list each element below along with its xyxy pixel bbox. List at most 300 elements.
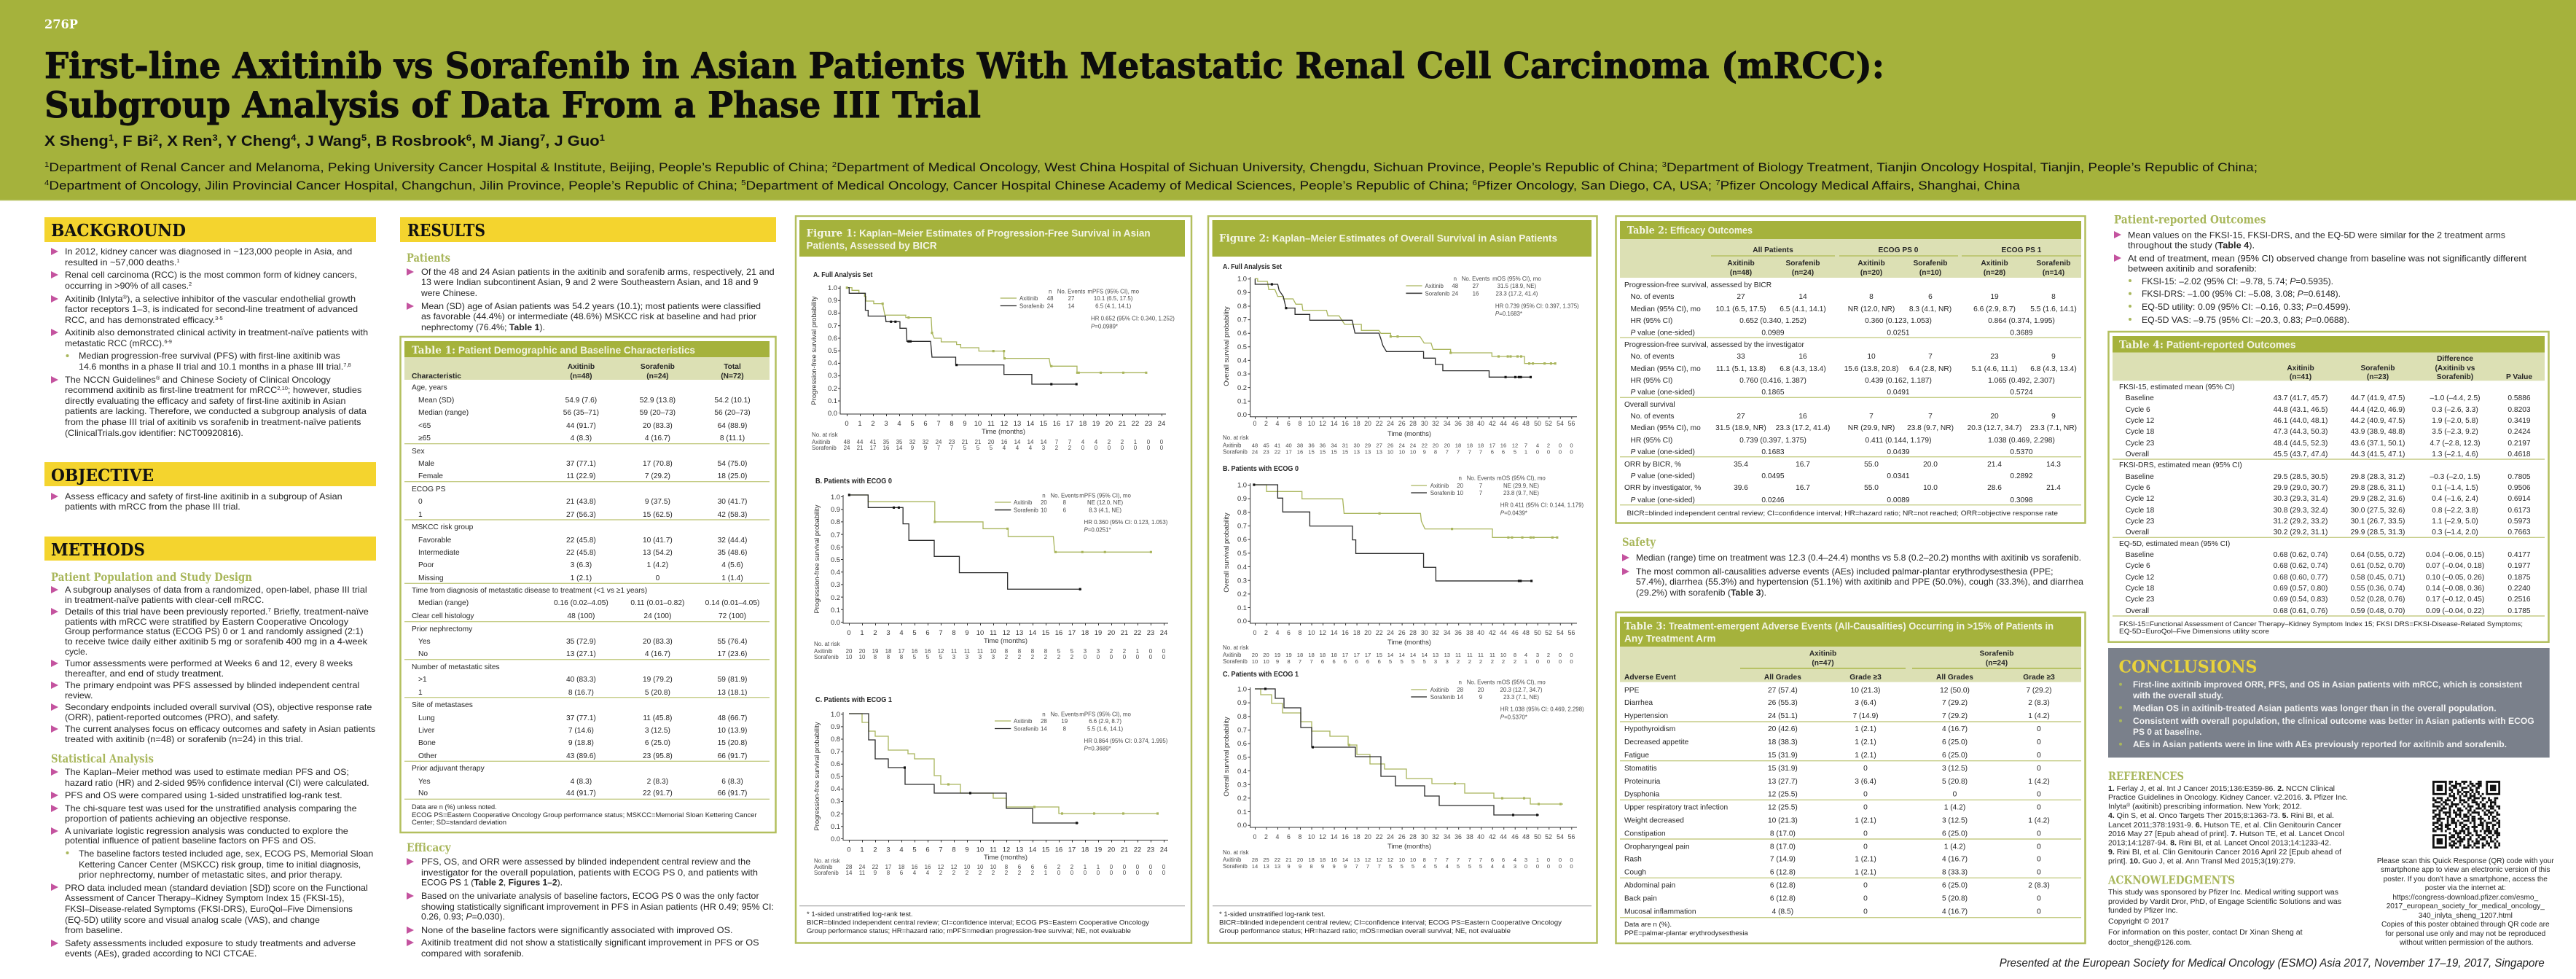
- chart 2B: ECOG 0 OS: Sorafenib: [1430, 490, 1455, 496]
- chart 2A: full analysis set OS: 0.1: [1237, 397, 1247, 405]
- conclusions bullets: with the overall study.: [2132, 690, 2223, 701]
- chart 1C: ECOG 1 PFS: 0: [1136, 864, 1140, 870]
- table 3 rows: 0: [1863, 765, 1868, 773]
- chart 2C: ECOG 1 OS: 25: [1263, 857, 1269, 863]
- chart 2A: full analysis set OS: 18: [1467, 442, 1473, 449]
- table 2 rows: 23.8 (9.7, NR): [1907, 424, 1954, 432]
- chart 2C: ECOG 1 OS: 9: [1321, 863, 1324, 870]
- chart 1C: ECOG 1 PFS: P=0.3689*: [1084, 746, 1111, 752]
- chart 2C: ECOG 1 OS: 7: [1457, 857, 1460, 863]
- statistical analysis bullets: A univariate logistic regression analysis was conducted to explore the: [65, 826, 348, 836]
- table 1 rows: 1: [418, 689, 423, 697]
- table 4 rows: 44.7 (41.9, 47.5): [2351, 394, 2405, 402]
- chart 1A: full analysis set PFS: 0: [1160, 445, 1164, 451]
- chart 2C: ECOG 1 OS: 0.9: [1237, 698, 1247, 706]
- chart 1B: ECOG 0 PFS: 5: [1057, 648, 1061, 655]
- chart 2C: ECOG 1 OS: Axitinib: [1223, 857, 1242, 863]
- chart 1B: ECOG 0 PFS: 0.2: [831, 593, 840, 601]
- chart 2A: full analysis set OS: 28: [1409, 420, 1417, 427]
- table 1 rows: 20 (83.3): [643, 422, 673, 430]
- table 1 rows: Prior adjuvant therapy: [412, 765, 485, 773]
- chart 1C: ECOG 1 PFS: 0: [847, 846, 851, 853]
- chart 1A: full analysis set PFS: 6.5 (4.1, 14.1): [1095, 303, 1132, 309]
- chart 2C: ECOG 1 OS: 36: [1455, 833, 1462, 840]
- chart 2B: ECOG 0 OS: 8: [1287, 658, 1291, 665]
- affiliations: [44, 161, 2258, 192]
- table 2 column headers: (n=14): [2043, 269, 2064, 277]
- chart 2B: ECOG 0 OS: 10: [1263, 658, 1269, 665]
- chart 1A: full analysis set PFS: 16: [1053, 419, 1060, 427]
- affiliations: 4: [44, 179, 50, 187]
- table 3 rows: Oropharyngeal pain: [1624, 843, 1689, 851]
- table 3 rows: 13 (27.7): [1768, 778, 1798, 786]
- chart 1C: ECOG 1 PFS: 22: [1134, 846, 1141, 853]
- table 4 rows: 1.1 (–2.9, 5.0): [2432, 518, 2478, 526]
- efficacy bullets: ECOG PS 1 (Table 2, Figures 1–2).: [421, 878, 563, 888]
- figure 2 footnote: BICR=blinded independent central review; CI=confidence interval; ECOG PS=Eastern Cooperative Oncology: [1219, 918, 1562, 927]
- chart 2B: ECOG 0 OS: 4: [1524, 652, 1527, 658]
- chart 2A: full analysis set OS: P=0.1683*: [1495, 311, 1522, 317]
- chart 1A: full analysis set PFS: n: [1049, 288, 1052, 295]
- QR instructions text: smartphone app to view an electronic version of this: [2381, 866, 2550, 874]
- chart 1C: ECOG 1 PFS: 0.2: [831, 810, 840, 818]
- table 3 rows: 7 (29.2): [2026, 687, 2052, 695]
- table 2: efficacy outcomes: [1616, 216, 2086, 523]
- patient population bullets: Details of this trial have been previously reported.: [65, 606, 253, 617]
- chart 2B: ECOG 0 OS: 3: [1446, 658, 1449, 665]
- chart 1B: ECOG 0 PFS: 10: [976, 628, 984, 636]
- statistical analysis bullets: from baseline.: [65, 925, 122, 935]
- chart 1C: ECOG 1 PFS: 2: [1018, 870, 1021, 876]
- background bullets: 2: [189, 282, 192, 287]
- chart 2C: ECOG 1 OS: 52: [1545, 833, 1552, 840]
- chart 2A: full analysis set OS: 10: [1387, 448, 1393, 455]
- heading: background: BACKGROUND: [51, 221, 186, 241]
- subheading: patient-reported outcomes: Patient-reported Outcomes: [2114, 213, 2266, 227]
- table 1 rows: 10 (13.9): [718, 727, 747, 735]
- chart 1B: ECOG 0 PFS: 0.3: [831, 580, 840, 588]
- chart 1A: full analysis set PFS: 3: [884, 419, 888, 427]
- table 3 rows: 1 (4.2): [2028, 778, 2050, 786]
- table 1 rows: 54 (75.0): [718, 460, 747, 468]
- table 2 rows: 0.1683: [1761, 448, 1785, 456]
- chart 1A: full analysis set PFS: 11: [987, 419, 995, 427]
- chart 1C: ECOG 1 PFS: 3: [886, 846, 890, 853]
- chart 2C: ECOG 1 OS: 14: [1457, 694, 1464, 701]
- table 3 rows: 12 (50.0): [1940, 687, 1970, 695]
- table 2 rows: 0.0246: [1761, 496, 1785, 504]
- chart 1C: ECOG 1 PFS: 10: [977, 864, 984, 870]
- table 4 rows: 0.7805: [2508, 473, 2531, 481]
- table 3 column headers: Grade ≥3: [2023, 674, 2055, 682]
- background bullets: patients are lacking. Therefore, we conducted a subgroup analysis of data: [65, 406, 367, 416]
- chart 1C: ECOG 1 PFS: 0.0: [831, 835, 840, 843]
- table 2 rows: 0.0495: [1761, 472, 1785, 480]
- chart 2B: ECOG 0 OS: 54: [1557, 629, 1564, 636]
- chart 2B: ECOG 0 OS: 3: [1434, 658, 1437, 665]
- panel: methods: [44, 537, 376, 959]
- chart 2B: ECOG 0 OS: 14: [1387, 652, 1393, 658]
- chart 1C: ECOG 1 PFS: 4: [899, 846, 904, 853]
- chart 2C: ECOG 1 OS: P=0.5370*: [1500, 714, 1527, 720]
- table 2 column headers: Sorafenib: [1914, 260, 1947, 268]
- chart 1B: ECOG 0 PFS: 3: [1084, 648, 1087, 655]
- chart 2A: full analysis set OS: 44: [1500, 420, 1507, 427]
- affiliations: 2: [832, 161, 837, 169]
- chart 2C: ECOG 1 OS: No. at risk: [1223, 849, 1249, 856]
- table 3 rows: 0: [1863, 895, 1868, 902]
- table 4 rows: 0.3419: [2508, 417, 2531, 425]
- chart 1B: ECOG 0 PFS: 3: [979, 654, 982, 660]
- chart 1C: ECOG 1 PFS: 5: [912, 846, 917, 853]
- table 4 rows: 31.2 (29.2, 33.2): [2274, 518, 2328, 526]
- reference list: 9. Rini BI, et al. Clin Genitourin Cancer 2016 April 22 [Epub ahead of: [2108, 849, 2341, 857]
- chart 1B: ECOG 0 PFS: Time (months): [984, 636, 1027, 644]
- objective bullet: patients with mRCC from the phase III trial.: [65, 502, 240, 512]
- chart 2A: full analysis set OS: Axitinib: [1425, 283, 1444, 289]
- safety bullets: [1622, 553, 2083, 598]
- chart 2C: ECOG 1 OS: 22: [1275, 857, 1280, 863]
- table 2 rows: 8: [2051, 293, 2056, 301]
- chart 1C: ECOG 1 PFS: 23: [1147, 846, 1154, 853]
- chart 1C: ECOG 1 PFS: 2: [992, 870, 995, 876]
- figure 1 footnote: Group performance status; HR=hazard ratio; mPFS=median progression-free survival; NE, not evaluable: [807, 927, 1131, 935]
- table 2 rows: 0.0491: [1887, 389, 1910, 397]
- chart 2C: ECOG 1 OS: 0: [1559, 857, 1562, 863]
- panel: references: [2107, 769, 2348, 947]
- chart 2C: ECOG 1 OS: 20.3 (12.7, 34.7): [1500, 687, 1543, 693]
- chart 1C: ECOG 1 PFS: 0: [1136, 870, 1140, 876]
- chart 2B: ECOG 0 OS: 0.4: [1237, 563, 1247, 571]
- chart 2C: ECOG 1 OS: 1: [1536, 857, 1539, 863]
- table 3 column headers: Grade ≥3: [1849, 674, 1882, 682]
- conclusions bullets: Consistent with overall population, the clinical outcome was better in Asian patients with ECOG: [2133, 716, 2534, 726]
- chart 1C: ECOG 1 PFS: 2: [1070, 864, 1073, 870]
- chart 2B: ECOG 0 OS: 28: [1409, 629, 1417, 636]
- table 2 rows: 11.1 (5.1, 13.8): [1716, 365, 1766, 373]
- table 2 rows: 21.4: [2046, 484, 2061, 492]
- chart 2B: ECOG 0 OS: 24: [1387, 629, 1394, 636]
- table 4 rows: 29.9 (29.0, 30.7): [2274, 484, 2328, 492]
- chart 2B: ECOG 0 OS: 14: [1422, 652, 1428, 658]
- chart 1C: ECOG 1 PFS: 0.3: [831, 797, 840, 805]
- chart 1C: ECOG 1 PFS: 0.7: [831, 747, 840, 755]
- table 1 rows: 4 (16.7): [645, 650, 670, 658]
- chart 2C: ECOG 1 OS: 38: [1466, 833, 1473, 840]
- table 2 column headers: ECOG PS 0: [1879, 246, 1919, 254]
- table 1 rows: 37 (77.1): [566, 460, 596, 468]
- chart 1B: ECOG 0 PFS: 13: [1016, 628, 1023, 636]
- chart 1B: ECOG 0 PFS: 11: [964, 648, 970, 655]
- table 4 rows: –1.0 (–4.4, 2.5): [2430, 394, 2481, 402]
- chart 2C: ECOG 1 OS: 34: [1444, 833, 1451, 840]
- table 2 rows: 20.0: [1923, 461, 1938, 469]
- chart 1C: ECOG 1 PFS: 8: [952, 846, 956, 853]
- chart 1B: ECOG 0 PFS: 6: [1063, 507, 1067, 513]
- chart 1B: ECOG 0 PFS: P=0.0251*: [1084, 527, 1111, 534]
- table 3 rows: Cough: [1624, 869, 1646, 876]
- safety bullets: Median (range) time on treatment was 12.3 (0.4–24.4) months vs 5.8 (0.2–20.2) months with axitinib vs sorafenib.: [1636, 553, 2081, 563]
- background bullets: Median progression-free survival (PFS) with first-line axitinib was: [79, 351, 340, 361]
- table 1: demographics: [401, 337, 775, 832]
- chart 2C: ECOG 1 OS: 46: [1511, 833, 1519, 840]
- chart 1A: full analysis set PFS: No. at risk: [812, 432, 838, 438]
- chart 1C: ECOG 1 PFS: 2: [1031, 870, 1034, 876]
- chart 1B: ECOG 0 PFS: 8: [900, 654, 904, 660]
- chart 1B: ECOG 0 PFS: 0: [1149, 654, 1153, 660]
- table 4 rows: [2113, 383, 2545, 616]
- figure 1 title: Figure 1: Kaplan–Meier Estimates of Progression-Free Survival in Asian: [807, 227, 1151, 239]
- chart 1A: full analysis set PFS: 0.2: [828, 384, 837, 392]
- table 3 rows: 0: [1863, 803, 1868, 812]
- table 2 rows: Median (95% CI), mo: [1631, 365, 1701, 373]
- chart 2C: ECOG 1 OS: 28: [1252, 857, 1258, 863]
- table 4 rows: 0.3 (–2.6, 3.3): [2432, 406, 2478, 414]
- chart 2A: full analysis set OS: 1.0: [1237, 274, 1247, 283]
- table 1 rows: Median (range): [418, 599, 469, 607]
- chart 2B: ECOG 0 OS: 20: [1252, 652, 1258, 658]
- chart 2C: ECOG 1 OS: 0: [1253, 833, 1257, 840]
- safety bullets: (29.2%) with sorafenib ( Table 3).: [1636, 588, 1766, 598]
- table 4 rows: 43.9 (38.9, 48.8): [2351, 428, 2405, 436]
- statistical analysis bullets: FKSI–Disease-related Symptoms (FKSI-DRS), EuroQol–Five Dimensions: [65, 904, 353, 914]
- table 3 rows: 6 (25.0): [1942, 752, 1968, 760]
- table 1 rows: 7 (14.6): [568, 727, 594, 735]
- table 1 rows: 22 (45.8): [566, 549, 596, 557]
- chart 2A: full analysis set OS: Time (months): [1387, 429, 1431, 437]
- table 1 rows: 66 (91.7): [718, 752, 747, 760]
- chart 1C: ECOG 1 PFS: No. Events: [1050, 711, 1078, 717]
- chart 2B: ECOG 0 OS: 2: [1457, 658, 1460, 665]
- table 2 rows: 27: [1737, 413, 1745, 421]
- authors: , F Bi: [114, 133, 153, 149]
- heading: objective: OBJECTIVE: [51, 466, 154, 485]
- table 3 rows: 5 (20.8): [1942, 895, 1968, 902]
- chart 1B: ECOG 0 PFS: 2: [1031, 654, 1034, 660]
- chart 1C: ECOG 1 PFS: 18: [1081, 846, 1089, 853]
- table 3 rows: Dysphonia: [1624, 790, 1659, 799]
- chart 2B: ECOG 0 OS: 2: [1514, 658, 1516, 665]
- chart 2C: ECOG 1 OS: 4: [1276, 833, 1280, 840]
- chart 1B: ECOG 0 PFS: 11: [990, 628, 997, 636]
- chart 2C: ECOG 1 OS: 0: [1570, 863, 1573, 870]
- PRO bullets: [2114, 230, 2527, 325]
- PRO bullets: EQ-5D VAS: –9.75 (95% CI: –20.3, 0.83; P=0.0688).: [2142, 315, 2349, 325]
- chart 1C: ECOG 1 PFS: 0: [1070, 870, 1074, 876]
- authors: 3: [212, 133, 218, 143]
- chart 2B: ECOG 0 OS: 23.8 (9.7, NE): [1503, 490, 1539, 496]
- table 3 rows: Back pain: [1624, 895, 1657, 902]
- table 2 column headers: ECOG PS 1: [2002, 246, 2042, 254]
- chart 1C: ECOG 1 PFS: 0.9: [831, 722, 840, 730]
- chart 2C: ECOG 1 OS: 16: [1342, 833, 1349, 840]
- heading: acknowledgments: ACKNOWLEDGMENTS: [2107, 873, 2235, 887]
- patient population bullets: Tumor assessments were performed at Weeks 6 and 12, every 8 weeks: [65, 658, 353, 668]
- chart 2A: full analysis set OS: 30: [1421, 420, 1428, 427]
- table 2 rows: 21.4: [1987, 461, 2002, 469]
- chart 2C: ECOG 1 OS: 5: [1468, 863, 1471, 870]
- chart 1A: full analysis set PFS: 20: [988, 439, 995, 445]
- table 1 rows: 13 (54.2): [643, 549, 673, 557]
- table 4 footnote: [2119, 620, 2523, 636]
- table 3 rows: PPE: [1624, 687, 1640, 695]
- chart 2C: ECOG 1 OS: 14: [1331, 833, 1338, 840]
- table 3 column headers: All Grades: [1764, 674, 1801, 682]
- chart 2A: full analysis set OS: 4: [1536, 442, 1539, 449]
- chart 2A: full analysis set OS: 10: [1410, 448, 1416, 455]
- chart 1A: full analysis set PFS: 14: [896, 445, 903, 451]
- chart 1A: full analysis set PFS: [810, 271, 1175, 451]
- background bullets: occurring in >90% of all cases.: [65, 281, 181, 291]
- chart 2A: full analysis set OS: 15: [1342, 448, 1348, 455]
- chart 2B: ECOG 0 OS: mOS (95% CI), mo: [1497, 475, 1546, 481]
- table 4 column headers: (n=23): [2367, 373, 2389, 381]
- chart 2A: full analysis set OS: 26: [1398, 420, 1406, 427]
- statistical analysis bullets: The baseline factors tested included age, sex, ECOG PS, Memorial Sloan: [79, 849, 373, 859]
- chart 2A: full analysis set OS: 48: [1452, 283, 1459, 289]
- chart 2C: ECOG 1 OS: 10: [1410, 857, 1416, 863]
- chart 2C: ECOG 1 OS: 0: [1536, 863, 1539, 870]
- chart 2C: ECOG 1 OS: 24: [1387, 833, 1394, 840]
- table 2 column headers: Axitinib: [1981, 260, 2008, 268]
- chart 1B: ECOG 0 PFS: 1: [860, 628, 864, 636]
- chart 2C: ECOG 1 OS: 7: [1378, 863, 1381, 870]
- chart 1B: ECOG 0 PFS: 11: [951, 648, 957, 655]
- chart 2C: ECOG 1 OS: 26: [1398, 833, 1406, 840]
- background bullets: recommend axitinib as first-line treatment for mRCC: [65, 385, 262, 395]
- table 4 rows: 0.17 (–0.12, 0.45): [2426, 596, 2484, 604]
- table 2 rows: 0.0439: [1887, 448, 1910, 456]
- chart 2C: ECOG 1 OS: 5: [1412, 863, 1414, 870]
- chart 2C: ECOG 1 OS: 5: [1457, 863, 1460, 870]
- chart 2B: ECOG 0 OS: 20: [1457, 483, 1464, 489]
- chart 1C: ECOG 1 PFS: 0: [1123, 864, 1127, 870]
- table 2 rows: 9: [2051, 413, 2056, 421]
- table 1 rows: 23 (95.8): [643, 752, 673, 760]
- chart 2B: ECOG 0 OS: 32: [1432, 629, 1439, 636]
- safety bullets: The most common all-causalities adverse events (AEs) included palmar-plantar erythrodysesthesia (PPE;: [1636, 566, 2054, 577]
- chart 2C: ECOG 1 OS: 18: [1308, 857, 1315, 863]
- chart 2C: ECOG 1 OS: 0.8: [1237, 712, 1247, 720]
- table 1 rows: 52.9 (13.8): [640, 397, 676, 405]
- table 3 rows: 4 (16.7): [1942, 908, 1968, 916]
- PRO bullets: Mean values on the FKSI-15, FKSI-DRS, and the EQ-5D were similar for the 2 treatment arms: [2128, 230, 2505, 240]
- chart 2B: ECOG 0 OS: 18: [1308, 652, 1315, 658]
- table 2 rows: 23.3 (17.2, 41.4): [1776, 424, 1830, 432]
- chart 1A: full analysis set PFS: 0: [1147, 439, 1151, 445]
- chart 2B: ECOG 0 OS: 2: [1479, 658, 1482, 665]
- chart 2B: ECOG 0 OS: 13: [1433, 652, 1438, 658]
- table 1 rows: ≥65: [418, 434, 431, 442]
- table 2 rows: 6: [1928, 293, 1933, 301]
- chart 2B: ECOG 0 OS: 13: [1444, 652, 1450, 658]
- chart 1A: full analysis set PFS: 6: [923, 419, 928, 427]
- chart 2A: full analysis set OS: 17: [1489, 442, 1495, 449]
- chart 1B: ECOG 0 PFS: 0.4: [831, 568, 840, 576]
- chart 2A: full analysis set OS: 24: [1452, 290, 1459, 297]
- table 1 rows: 43 (89.6): [566, 752, 596, 760]
- chart 1C: ECOG 1 PFS: 0.8: [831, 735, 840, 743]
- chart 1C: ECOG 1 PFS: 10: [976, 846, 984, 853]
- chart 2C: ECOG 1 OS: 7: [1355, 863, 1358, 870]
- chart 2B: ECOG 0 OS: P=0.0439*: [1500, 510, 1527, 516]
- table 3 rows: Mucosal inflammation: [1624, 908, 1696, 916]
- chart 2A: full analysis set OS: 0: [1559, 448, 1562, 455]
- chart 2A: full analysis set OS: 0: [1253, 420, 1257, 427]
- patient population bullets: cycle.: [65, 647, 87, 657]
- table 1 rows: 3 (12.5): [645, 727, 670, 735]
- chart 1C: ECOG 1 PFS: 0: [1149, 870, 1153, 876]
- chart 2A: full analysis set OS: 18: [1478, 442, 1484, 449]
- chart 2A: full analysis set OS: 4: [1276, 420, 1280, 427]
- chart 1A: full analysis set PFS: 0: [1095, 445, 1098, 451]
- chart 1B: ECOG 0 PFS: 2: [1123, 648, 1126, 655]
- chart 2A: full analysis set OS: Overall survival probability: [1222, 306, 1230, 386]
- table 2 title: Table 2: Efficacy Outcomes: [1627, 225, 1753, 236]
- table 3 rows: 0: [2037, 765, 2041, 773]
- background bullets: 3-5: [215, 316, 223, 321]
- table 1 rows: Male: [418, 460, 434, 468]
- table 2 column headers: Sorafenib: [1786, 260, 1820, 268]
- chart 1B: ECOG 0 PFS: 8: [952, 628, 956, 636]
- chart 2A: full analysis set OS: 50: [1534, 420, 1541, 427]
- chart 2C: ECOG 1 OS: 40: [1477, 833, 1484, 840]
- chart 2A: full analysis set OS: 23: [1263, 448, 1269, 455]
- chart 1B: ECOG 0 PFS: 2: [1070, 654, 1073, 660]
- chart 1A: full analysis set PFS: HR 0.652 (95% CI: 0.340, 1.252): [1091, 316, 1175, 322]
- patients bullets: nephrectomy (76.4%; Table 1).: [421, 322, 545, 332]
- table 4 rows: 29.9 (28.5, 31.3): [2351, 528, 2405, 537]
- table 1 title: Table 1: Patient Demographic and Baseline Characteristics: [412, 344, 695, 356]
- table 4 rows: Cycle 6: [2126, 562, 2150, 570]
- chart 2A: full analysis set OS: 54: [1557, 420, 1564, 427]
- chart 2A: full analysis set OS: 20: [1433, 442, 1438, 449]
- patient population bullets: Group performance status (ECOG PS) 0 or 1 and randomly assigned (2:1): [65, 626, 364, 636]
- table 4 rows: Baseline: [2126, 551, 2154, 559]
- chart 2C: ECOG 1 OS: 0: [1524, 863, 1527, 870]
- chart 2B: ECOG 0 OS: 1.0: [1237, 481, 1247, 488]
- chart 2A: full analysis set OS: 6: [1502, 448, 1505, 455]
- heading: references: REFERENCES: [2108, 769, 2184, 783]
- table 3 rows: 0: [2037, 856, 2041, 863]
- figure 1 title: Patients, Assessed by BICR: [807, 239, 937, 251]
- reference list: 2016 May 27 [Epub ahead of print]. 7. Hutson TE, et al. Lancet Oncol: [2108, 830, 2344, 838]
- figure 1 footnote: [799, 906, 1185, 935]
- table 1 rows: 30 (41.7): [718, 498, 747, 506]
- table 1 rows: Missing: [418, 574, 444, 582]
- panel: safety text: [1622, 535, 2083, 598]
- chart 1A: full analysis set PFS: 0.0: [828, 409, 837, 417]
- chart 1C: ECOG 1 PFS: mPFS (95% CI), mo: [1079, 711, 1132, 717]
- table 1 column headers: Characteristic: [412, 373, 461, 381]
- chart 1C: ECOG 1 PFS: 0: [1057, 870, 1061, 876]
- table 3 rows: 0: [2037, 908, 2041, 916]
- table 2 rows: 0.760 (0.416, 1.387): [1739, 377, 1806, 385]
- chart 1A: full analysis set PFS: 19: [1092, 419, 1100, 427]
- efficacy bullets: 0.26, 0.93; P=0.030).: [421, 912, 505, 922]
- chart 2A: full analysis set OS: 0.2: [1237, 383, 1247, 391]
- statistical analysis bullets: prior nephrectomy, number of metastatic sites, and prior therapy.: [79, 870, 342, 880]
- chart 2C: ECOG 1 OS: 5: [1389, 863, 1392, 870]
- table 3 rows: 7 (14.9): [1852, 712, 1879, 720]
- chart 1A: full analysis set PFS: 41: [870, 439, 876, 445]
- table 1 rows: 35 (48.6): [718, 549, 747, 557]
- chart 1A: full analysis set PFS: 13: [1014, 419, 1021, 427]
- chart 1A: full analysis set PFS: 9: [963, 419, 967, 427]
- table 3 rows: 0: [2037, 830, 2041, 838]
- table 4 rows: 4.7 (–2.8, 12.3): [2430, 440, 2481, 448]
- chart 1C: ECOG 1 PFS: Axitinib: [814, 864, 833, 870]
